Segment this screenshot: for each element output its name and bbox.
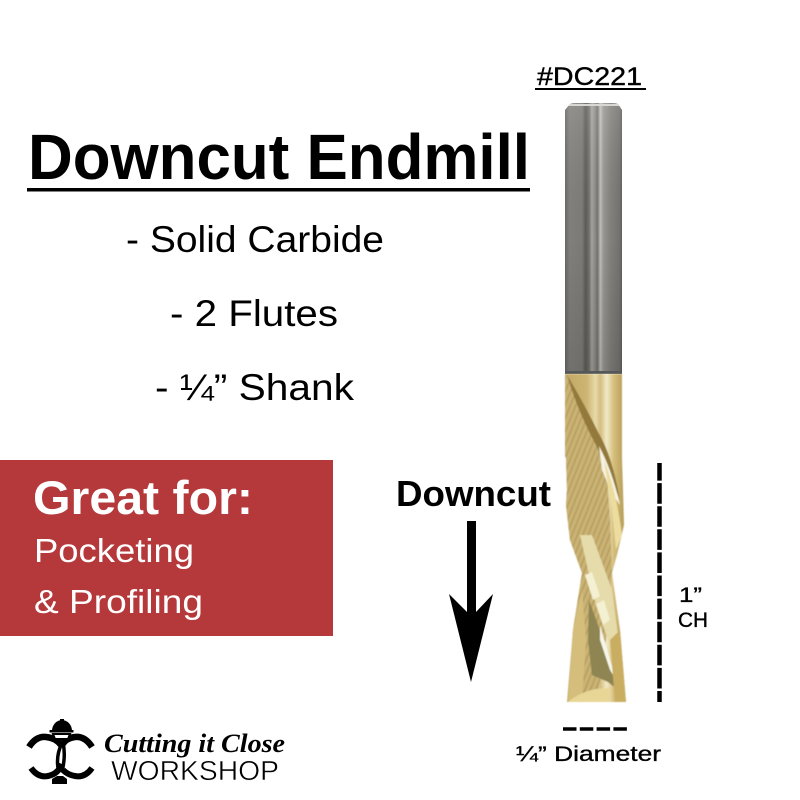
panel heading: Great for: (33, 471, 253, 524)
dimension line: cut height (657, 463, 662, 702)
gold flutes (565, 374, 626, 702)
panel text: pocketing: Pocketing (34, 532, 194, 569)
label: cut height: CH (678, 609, 708, 632)
dimension line: diameter (563, 727, 627, 731)
logo (29, 719, 285, 786)
logo script: Cutting it Close (104, 729, 285, 758)
panel: great for (0, 460, 333, 636)
feature: shank: - ¼” Shank (155, 367, 355, 408)
feature: solid carbide: - Solid Carbide (126, 219, 384, 260)
title: Downcut Endmill (28, 121, 530, 193)
logo wordmark: WORKSHOP (111, 755, 279, 786)
downcut label: Downcut (396, 473, 551, 514)
feature list (126, 219, 384, 408)
label: diameter: ¼” Diameter (516, 743, 661, 766)
shank (565, 103, 622, 374)
panel text: profiling: & Profiling (34, 583, 203, 620)
label: cut height: 1” (679, 584, 702, 607)
part number: #DC221 (537, 63, 642, 91)
arrow: downcut direction (449, 521, 493, 682)
label: cut height (678, 584, 708, 632)
logo icon (29, 719, 92, 784)
feature: flutes: - 2 Flutes (170, 293, 338, 334)
endmill bit (565, 103, 626, 702)
